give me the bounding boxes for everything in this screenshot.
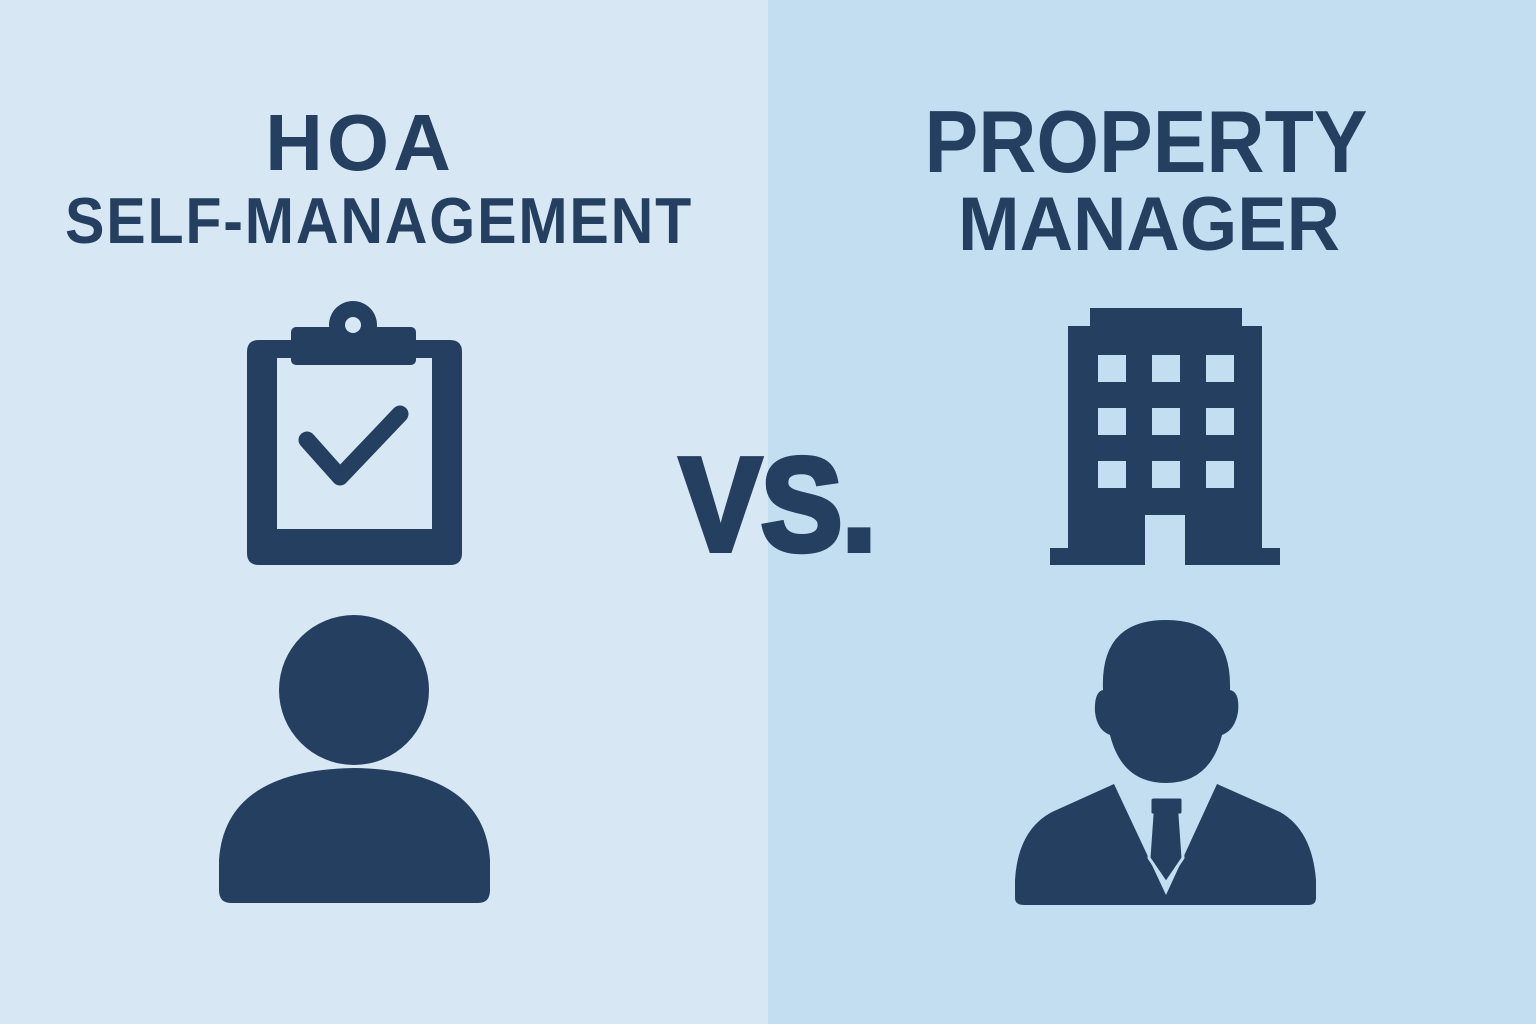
title: property manager <box>924 92 1368 267</box>
icon: person <box>219 615 490 903</box>
icon: businessman <box>1015 620 1316 905</box>
title: HOA self-management: SELF-MANAGEMENT <box>65 184 693 257</box>
vs label: VS. <box>680 431 876 578</box>
title: property manager: MANAGER <box>958 182 1340 267</box>
icon: clipboard with check <box>247 301 462 565</box>
title: HOA self-management: HOA <box>265 98 455 187</box>
title: HOA self-management <box>65 98 693 257</box>
icon: office building <box>1050 308 1280 565</box>
title: property manager: PROPERTY <box>924 92 1368 191</box>
